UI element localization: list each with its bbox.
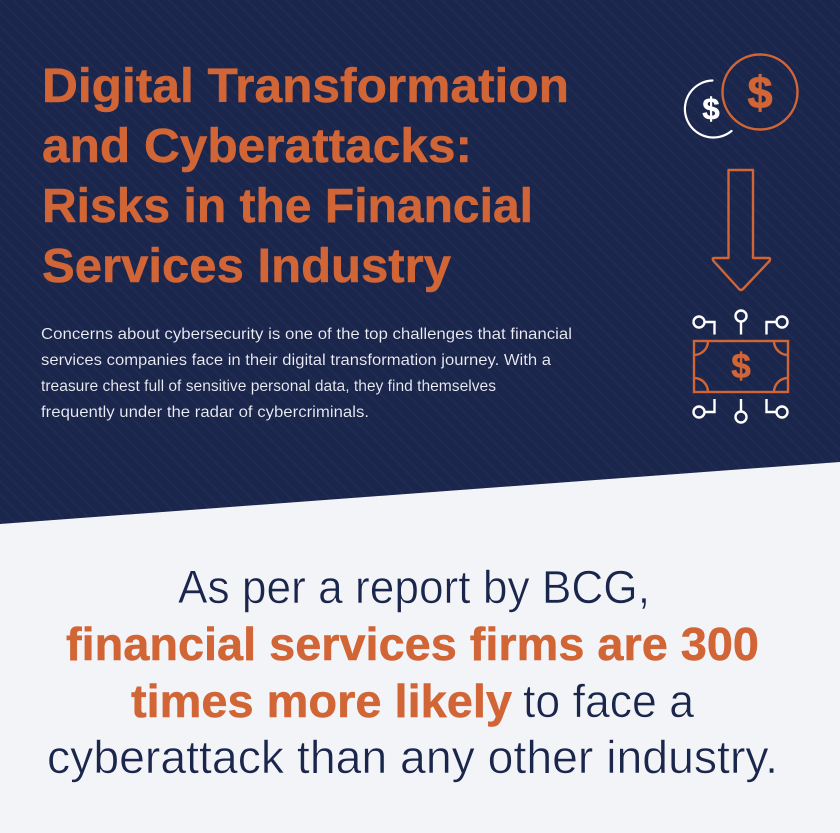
- text block: introduction: [41, 326, 572, 421]
- heading: BCG statistic statement: to face a: [523, 675, 694, 727]
- icon: digital banknote with circuit nodes: [694, 310, 788, 422]
- heading: BCG statistic statement: [47, 561, 778, 783]
- heading: BCG statistic statement: times more likely: [131, 675, 512, 727]
- title: Risks in the Financial: [42, 180, 533, 233]
- title: Services Industry: [42, 240, 451, 293]
- icon: dollar coins: $: [747, 67, 773, 118]
- banknote dollar sign: $: [731, 347, 751, 386]
- title: Digital Transformation: [42, 60, 569, 113]
- arrow: pointing down: [713, 170, 770, 290]
- text block: introduction: treasure chest full of sensitive personal data, they find themselves: [41, 378, 496, 395]
- text block: introduction: frequently under the radar of cybercriminals.: [41, 404, 369, 421]
- title: [42, 60, 569, 293]
- panel: navy header with slanted edge: [0, 0, 840, 524]
- icon: dollar coins: $: [702, 91, 720, 126]
- banknote: [694, 341, 788, 392]
- icon: dollar coins: [685, 54, 798, 137]
- title: and Cyberattacks:: [42, 120, 472, 173]
- text block: introduction: services companies face in their digital transformation journey. With a: [41, 352, 551, 369]
- heading: BCG statistic statement: financial services firms are 300: [66, 618, 759, 670]
- circuit nodes: [694, 310, 788, 422]
- heading: BCG statistic statement: cyberattack than any other industry.: [47, 731, 778, 783]
- text block: introduction: Concerns about cybersecurity is one of the top challenges that financial: [41, 326, 572, 343]
- heading: BCG statistic statement: As per a report by BCG,: [178, 561, 650, 613]
